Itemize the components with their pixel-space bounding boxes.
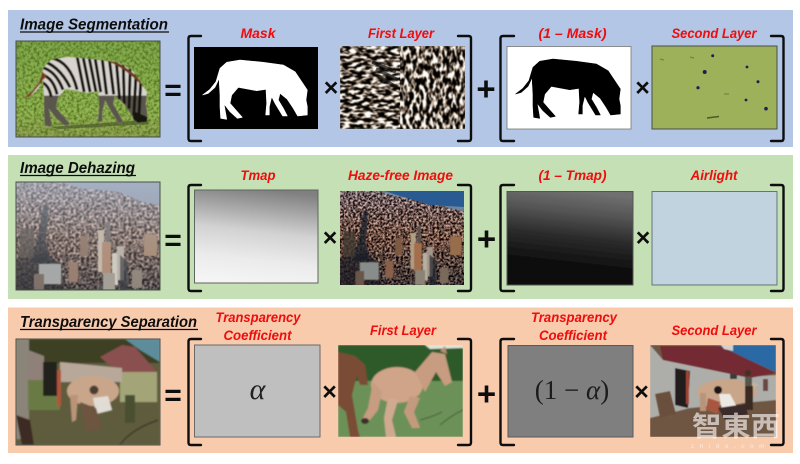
left bracket xyxy=(188,339,201,445)
equals sign: = xyxy=(164,379,182,412)
photo: horse layer xyxy=(338,345,463,437)
photo: haze-free city xyxy=(340,191,464,285)
right bracket xyxy=(771,185,784,291)
label: one minus tmap: (1 – Tmap) xyxy=(538,168,607,183)
label: mask: Mask xyxy=(240,26,277,41)
label: tmap: Tmap xyxy=(240,168,276,183)
multiply sign: × xyxy=(323,224,337,252)
multiply sign: × xyxy=(634,378,649,406)
multiply sign: × xyxy=(635,74,650,102)
label: first layer: First Layer xyxy=(368,26,435,41)
label: transparency coefficient xyxy=(216,310,302,343)
label: airlight: Airlight xyxy=(690,168,738,183)
right bracket xyxy=(771,339,784,445)
first layer texture xyxy=(340,46,465,129)
label: transparency coefficient: Transparency xyxy=(531,310,618,325)
second layer: grass with dots xyxy=(652,46,777,129)
photo: zebra on grass xyxy=(16,41,160,137)
one minus alpha swatch xyxy=(508,346,633,437)
right bracket xyxy=(458,339,471,445)
left bracket xyxy=(188,185,201,291)
alpha swatch: α xyxy=(250,373,267,406)
inverse mask image xyxy=(507,46,631,129)
left bracket xyxy=(500,185,514,291)
multiply sign: × xyxy=(322,378,337,406)
equals sign: = xyxy=(164,224,182,257)
photo: farmhouse layer xyxy=(650,345,776,437)
inverse transmission map xyxy=(507,192,633,285)
heading: image segmentation: Image Segmentation xyxy=(20,16,168,34)
multiply sign: × xyxy=(636,224,650,252)
label: haze-free image: Haze-free Image xyxy=(348,168,453,183)
equals sign: = xyxy=(164,74,182,107)
label: transparency coefficient: Transparency xyxy=(216,310,302,325)
photo frame xyxy=(16,339,160,445)
panel: image segmentation xyxy=(8,10,793,147)
label: second layer: Second Layer xyxy=(672,26,757,41)
panel: transparency separation xyxy=(8,308,793,453)
label: second layer: Second Layer xyxy=(672,323,757,338)
alpha swatch xyxy=(194,345,320,437)
right bracket xyxy=(771,36,784,141)
plus sign: + xyxy=(477,375,496,412)
label: transparency coefficient xyxy=(531,310,618,343)
heading: transparency separation: Transparency Separation xyxy=(20,314,197,331)
transmission map xyxy=(194,190,318,283)
left bracket xyxy=(500,36,514,141)
mask image xyxy=(194,47,318,129)
right bracket xyxy=(458,185,471,291)
label: transparency coefficient: Coefficient xyxy=(539,328,607,343)
label: one minus mask: (1 – Mask) xyxy=(538,26,607,41)
label: first layer: First Layer xyxy=(370,323,437,338)
watermark: zhidx.com xyxy=(691,444,770,450)
heading: image dehazing: Image Dehazing xyxy=(20,160,135,177)
panel: image dehazing xyxy=(8,155,793,299)
left bracket xyxy=(500,339,514,445)
photo: hazy city xyxy=(16,182,160,290)
plus sign: + xyxy=(477,220,496,257)
one minus alpha swatch: (1 − α) xyxy=(535,375,609,405)
photo: blended reflection scene xyxy=(16,339,160,445)
photo frame xyxy=(16,182,160,290)
multiply sign: × xyxy=(324,74,338,102)
label: transparency coefficient: Coefficient xyxy=(224,328,292,343)
right bracket xyxy=(458,36,471,141)
plus sign: + xyxy=(476,70,496,107)
photo frame xyxy=(16,41,160,137)
airlight colour swatch xyxy=(652,192,777,285)
left bracket xyxy=(188,36,201,141)
watermark: 智東西 xyxy=(692,412,780,442)
